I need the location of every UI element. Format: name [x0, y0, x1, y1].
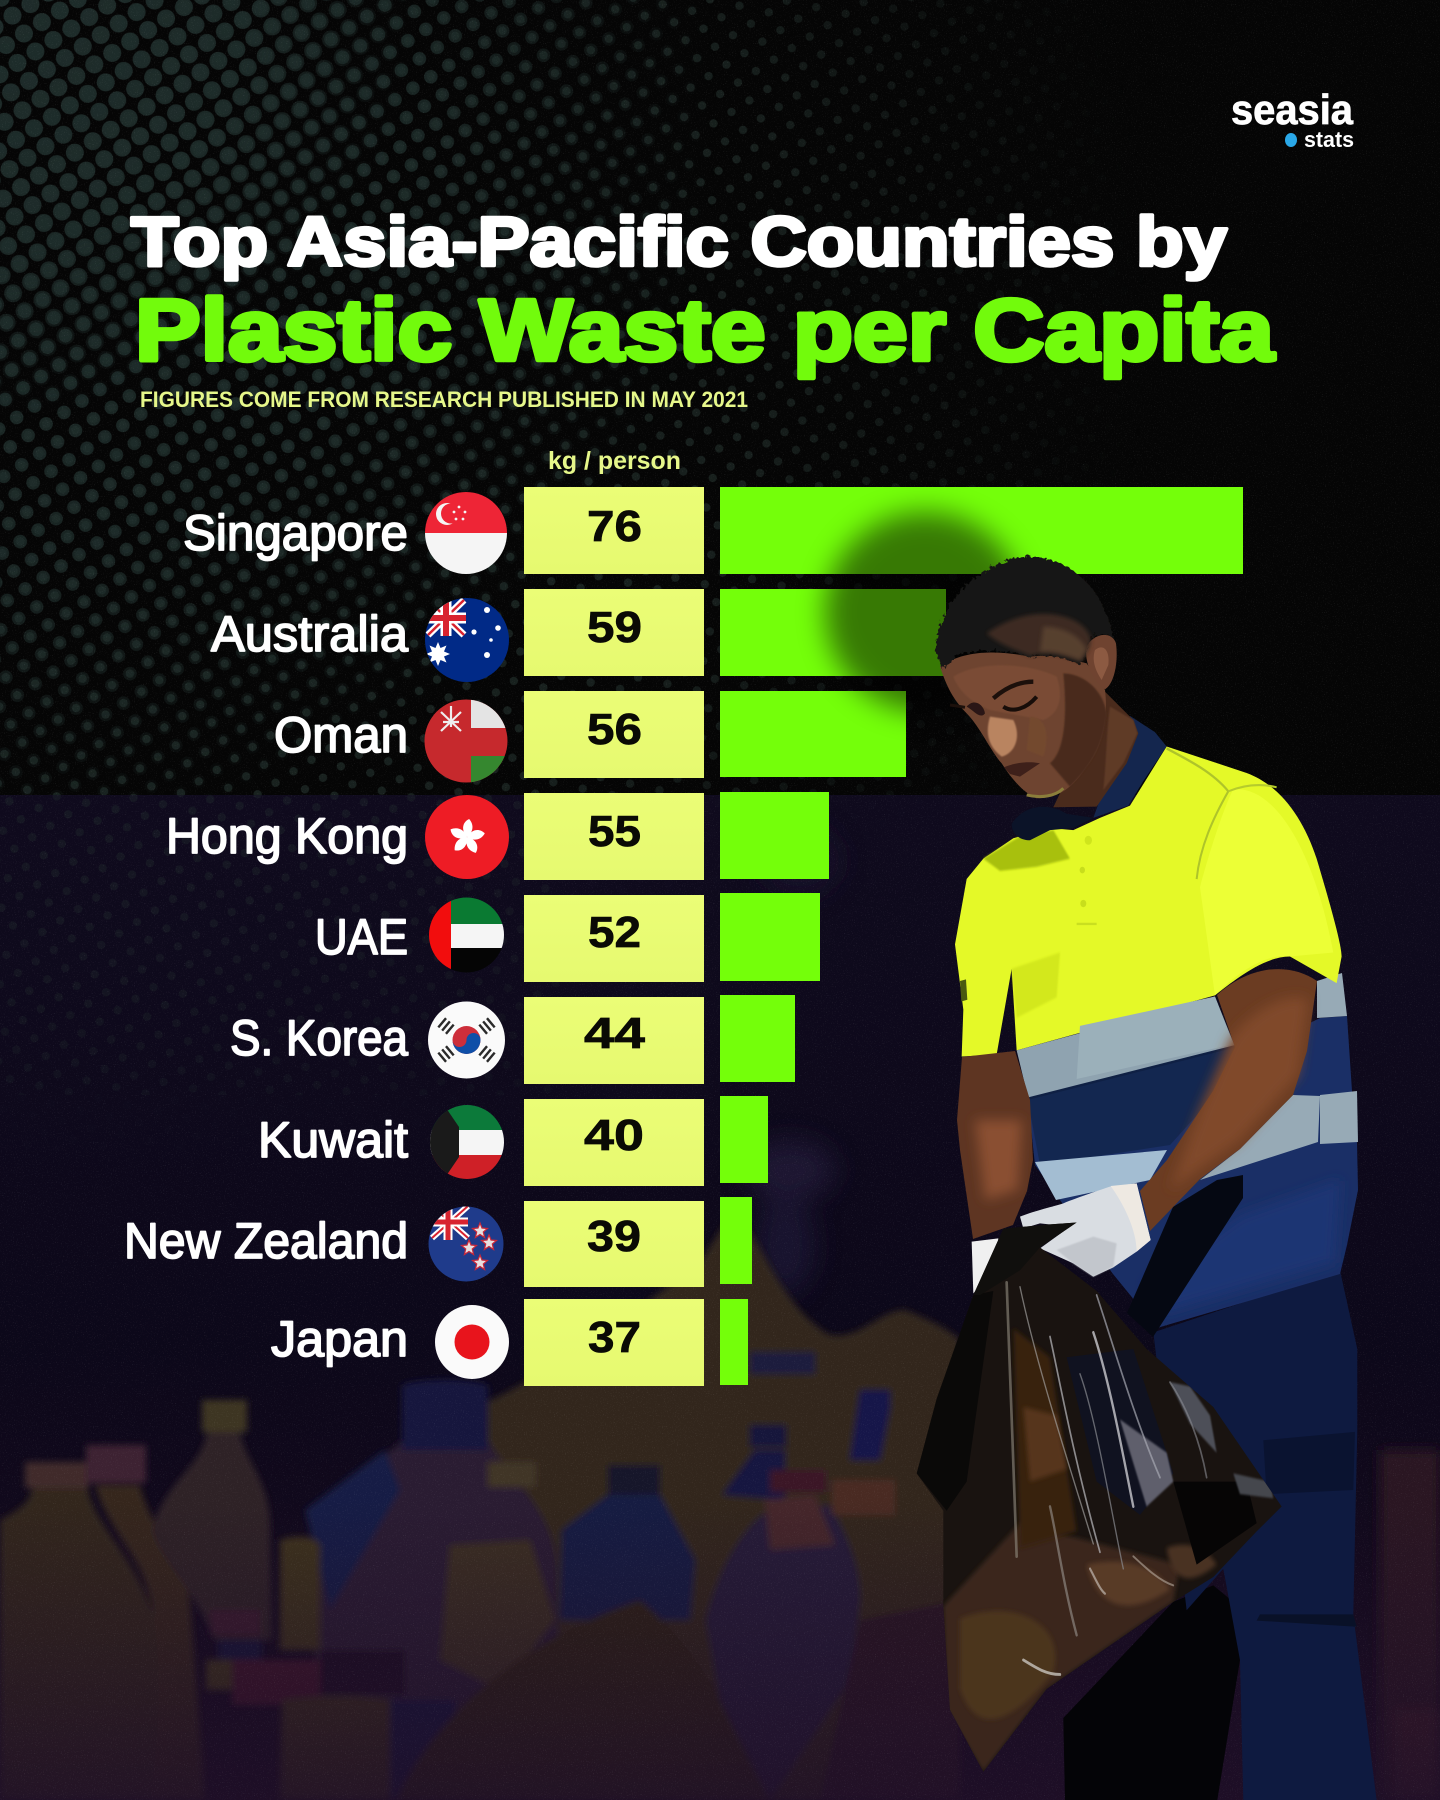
values: [584, 502, 646, 1362]
bar chart: [720, 487, 1243, 1385]
country labels: Australia: [211, 606, 408, 662]
logo: seasia stats: seasia: [1231, 86, 1354, 133]
country labels: UAE: [315, 909, 408, 965]
flag: Japan: [435, 1305, 509, 1379]
title: Top Asia-Pacific Countries by: [131, 202, 1227, 280]
subtitle: FIGURES COME FROM RESEARCH PUBLISHED IN MAY 2021: [140, 387, 748, 412]
logo: seasia stats: stats: [1304, 127, 1354, 152]
country labels: [124, 505, 408, 1367]
values: 44: [584, 1009, 646, 1058]
country labels: S. Korea: [230, 1010, 408, 1066]
values: 55: [588, 807, 641, 856]
right arm: [1140, 969, 1317, 1231]
photo: worker with bag: [913, 557, 1377, 1800]
flag: UAE: [429, 898, 504, 972]
values: 39: [587, 1212, 641, 1261]
man's shadow on bars: [825, 512, 1025, 712]
title: [131, 202, 1275, 379]
values: 76: [587, 502, 642, 551]
upper shirt, collar, stripes (zoom space): [955, 716, 1342, 1099]
face: [940, 652, 1106, 798]
flag: Hong Kong: [425, 795, 509, 879]
flag: New Zealand: [428, 1206, 504, 1282]
logo: seasia stats: [1231, 86, 1354, 152]
country labels: Kuwait: [258, 1112, 408, 1168]
head (zoom space): [935, 557, 1138, 807]
country labels: Japan: [271, 1311, 408, 1367]
flag: Australia: [425, 598, 509, 682]
hair: [935, 557, 1113, 670]
country labels: New Zealand: [124, 1213, 408, 1269]
flag: Singapore: [425, 492, 507, 574]
olive mass behind: [470, 1218, 960, 1800]
title: Plastic Waste per Capita: [135, 282, 1275, 379]
values: 52: [588, 908, 641, 957]
lower shirt: [1028, 1016, 1358, 1328]
values: 59: [587, 603, 642, 652]
values: 40: [584, 1111, 644, 1160]
country labels: Oman: [274, 707, 408, 763]
background: dark dotted upper area: [0, 0, 1091, 795]
flag: South Korea: [428, 1002, 505, 1078]
reflective band segments: [1035, 973, 1358, 1200]
garbage bag: [913, 1220, 1287, 1776]
country labels: Singapore: [183, 505, 408, 561]
flag: Kuwait: [430, 1105, 504, 1179]
gloves: [972, 1183, 1151, 1293]
neck: [1053, 690, 1138, 807]
country labels: Hong Kong: [166, 808, 408, 864]
black shadow strip under arm: [1127, 1175, 1243, 1337]
values: 37: [588, 1313, 641, 1362]
ear: [1086, 635, 1117, 689]
background: purple lower area with plastic bottles: [0, 795, 1440, 1800]
pants: [1063, 1270, 1377, 1800]
values: 56: [587, 705, 642, 754]
left arm: [957, 1051, 1033, 1239]
value boxes: [524, 487, 704, 1386]
column unit label: kg / person: [548, 447, 681, 475]
flag: Oman: [424, 700, 508, 782]
dim patches at right edge: [1380, 1450, 1440, 1800]
